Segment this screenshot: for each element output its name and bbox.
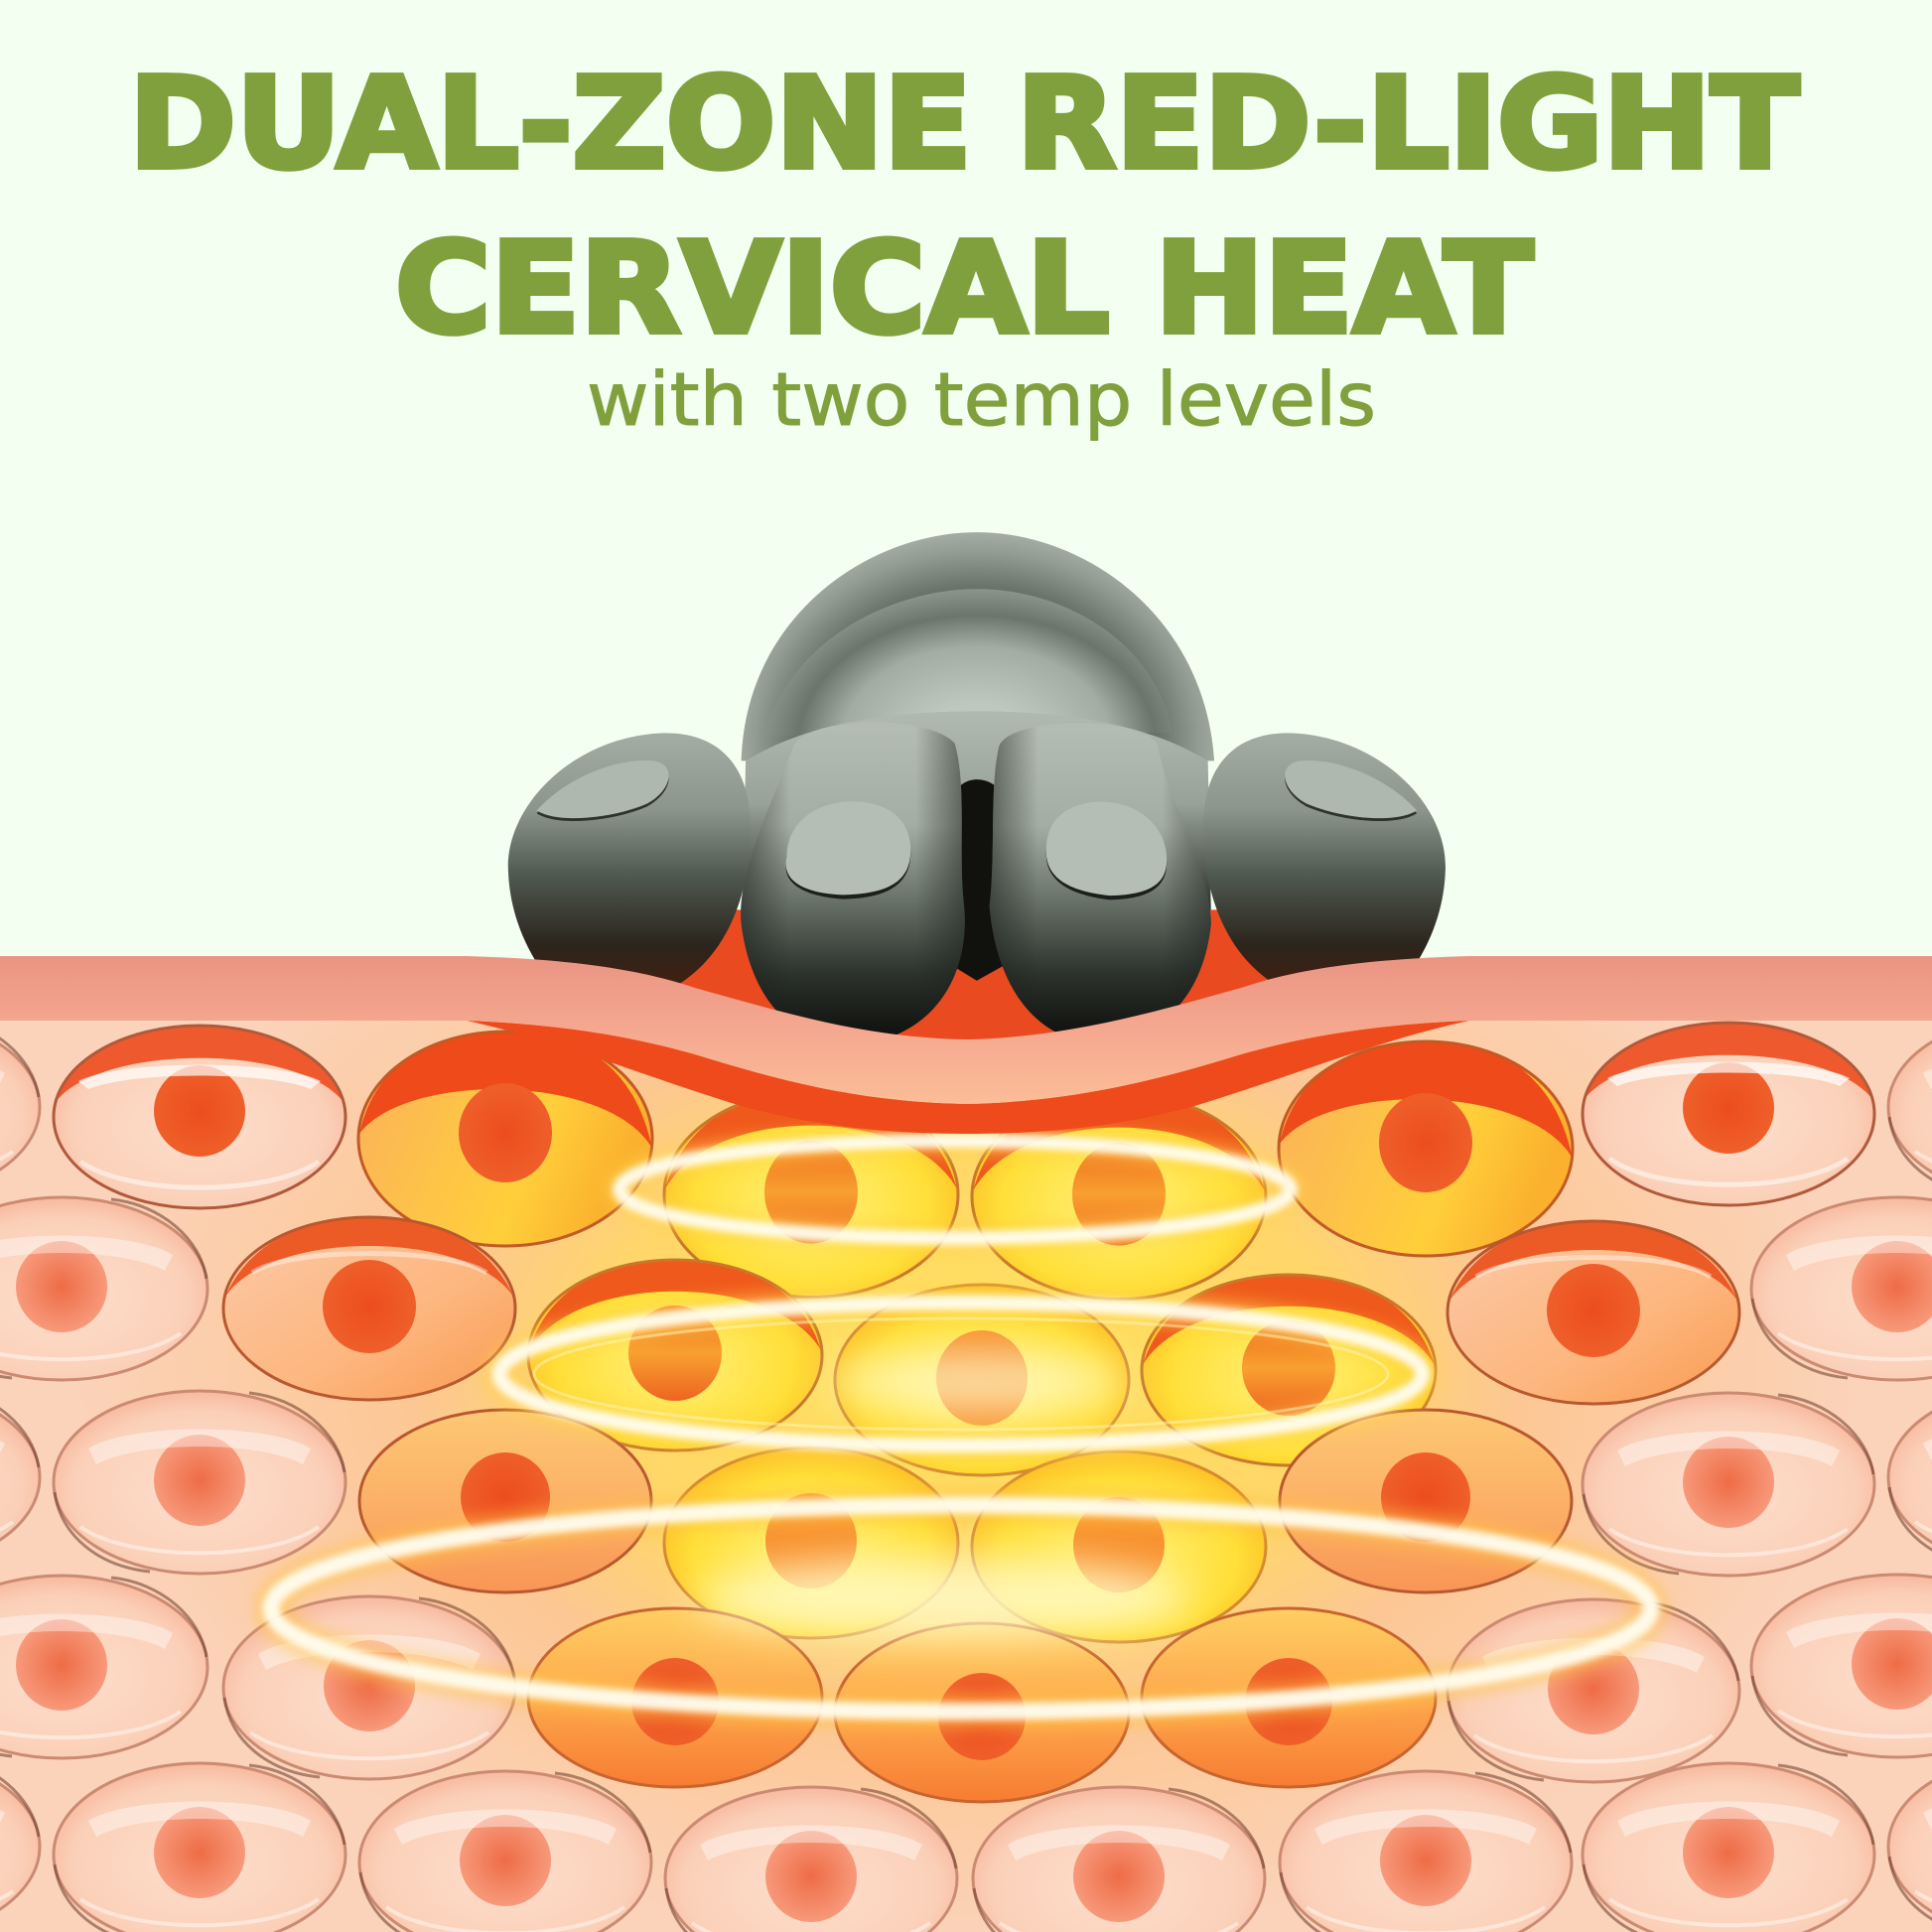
tissue background — [0, 993, 1932, 1932]
heat ring: bottom — [271, 1505, 1651, 1712]
red band under skin — [467, 1021, 1469, 1134]
central bridge — [743, 711, 1211, 917]
title: CERVICAL HEAT — [395, 215, 1533, 361]
title: DUAL-ZONE RED-LIGHT — [129, 51, 1799, 197]
subtitle: with two temp levels — [587, 357, 1376, 443]
back arch — [742, 532, 1214, 760]
outer right finger — [1203, 733, 1446, 992]
heat glow core — [695, 1352, 1191, 1638]
heat ring: middle — [499, 1303, 1423, 1446]
inner right finger — [990, 723, 1211, 1044]
row of cells 3 — [0, 1386, 1932, 1642]
skin layer — [0, 956, 1932, 1134]
outer left finger — [508, 733, 751, 992]
red tissue behind fingers — [666, 909, 1287, 1048]
row of cells 1 — [0, 1016, 1932, 1300]
row of cells 4 — [0, 1575, 1932, 1802]
inner arch — [764, 589, 1172, 736]
gap between fingers — [942, 779, 1015, 981]
inner left finger — [741, 722, 965, 1044]
tissue cross-section illustration — [0, 993, 1932, 1932]
massager device — [508, 532, 1446, 1048]
heat ring: top — [620, 1141, 1291, 1238]
skin surface — [0, 956, 1932, 1104]
row of cells 2 — [0, 1197, 1932, 1475]
title — [129, 51, 1799, 361]
row of cells 5 — [0, 1755, 1932, 1932]
